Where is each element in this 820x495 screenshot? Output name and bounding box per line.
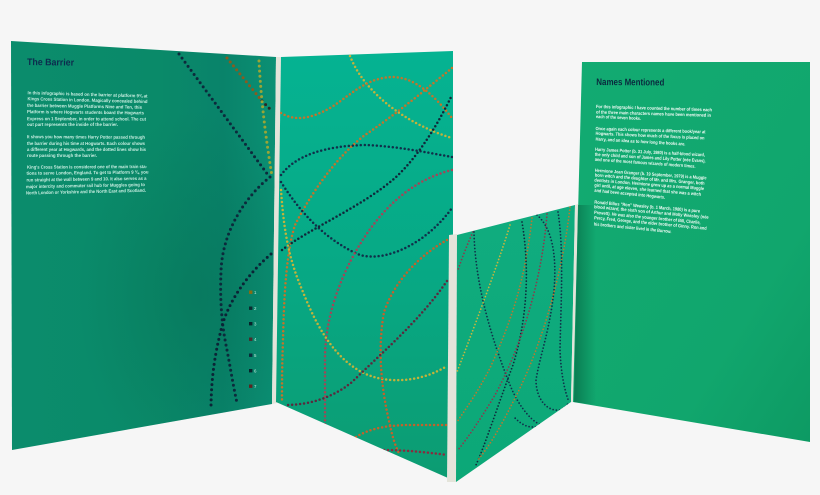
legend: seven book colours: 2 [254, 306, 257, 311]
text block: barrier introduction: Express on 1 September, in order to attend school. The cut [27, 116, 146, 122]
text block: names explanation and character biographies: Hermione Jean Granger (b. 19 September, 1979) is a Muggle [595, 168, 707, 180]
text block: barrier introduction: Platform is where Hogwarts students board the Hogwarts [27, 109, 144, 115]
legend: seven book colours: 5 [254, 353, 257, 358]
text block: names explanation and character biographies: Hogwarts. This shows how much of the focus is placed on [595, 131, 705, 140]
text block: barrier introduction: North London or Yorkshire and the North East and Scotland. [26, 188, 146, 195]
text block: names explanation and character biographies: Harry James Potter (b. 31 July, 1980) is a half-blood wizard, [595, 147, 705, 157]
legend: seven book colours [249, 290, 257, 389]
panel: third dotted chart [456, 205, 575, 482]
text block: names explanation and character biographies: blood wizard, the sixth son of Arthur and Molly Weasley (née [594, 204, 709, 220]
text block: names explanation and character biographies: Prewett). He was also the younger brother of Bill, Charlie, [594, 210, 701, 225]
text block: names explanation and character biographies: of the three main characters names have been mentioned in [596, 110, 711, 118]
text block: barrier introduction: the barrier between Muggle Platforms Nine and Ten, this [27, 103, 142, 110]
text block: names explanation and character biographies [594, 104, 712, 234]
chart: dotted route lines, centre panel [281, 56, 452, 455]
text block: barrier introduction: out part represents the inside of the barrier. [27, 122, 118, 127]
legend: seven book colours: 3 [254, 321, 257, 326]
text block: names explanation and character biographies: Once again each colour represents a different book/year at [595, 126, 706, 134]
text block: barrier introduction: tions to serve London, England. To get to Platform 9 ¾, you [26, 169, 149, 176]
text block: barrier introduction: In this infographic is based on the barrier at platform 9¾ at [27, 89, 148, 99]
panel: The Barrier [11, 41, 276, 450]
text block: barrier introduction: Kings Cross Station in London. Magically concealed behind [27, 96, 148, 104]
divider: second fold [447, 234, 457, 482]
text block: barrier introduction: major intercity and commuter rail hub for Muggles going to [26, 182, 145, 189]
chart: dotted route lines, third panel [457, 207, 570, 465]
legend: seven book colours: 1 [254, 290, 257, 295]
text block: names explanation and character biographies: the only child and son of James and Lily Potter (née Evans), [595, 152, 706, 163]
text block: names explanation and character biographies: girl until, at age eleven, she learned that she was a witch [594, 183, 701, 197]
text block: barrier introduction: a different year at Hogwards, and the dotted lines show his [27, 147, 146, 152]
legend: seven book colours: 4 [254, 337, 257, 342]
text block: names explanation and character biographies: each of the seven books. [596, 114, 641, 121]
heading: The Barrier: The Barrier [27, 57, 74, 69]
divider: first fold [272, 57, 281, 404]
text block: names explanation and character biographies: Harry, and an idea as to how long the books are. [595, 137, 686, 147]
legend: seven book colours: 6 [254, 368, 257, 373]
panel: Names Mentioned [573, 62, 810, 442]
text block: barrier introduction: King's Cross Station is considered one of the main train sta- [27, 164, 147, 170]
text block: names explanation and character biographies: dentists in London. Hermione grew up as a normal Muggle [594, 178, 705, 191]
text block: barrier introduction: It shows you how many times Harry Potter passed through [27, 134, 145, 140]
text block: names explanation and character biographies: and one of the most famous wizards of modern times. [595, 157, 696, 169]
text block: names explanation and character biographies: Ronald Bilius "Ron" Weasley (b. 1 March, 1980) is a pure [594, 200, 701, 214]
text block: barrier introduction: run straight at the wall between 9 and 10. It also serves as a [26, 176, 147, 182]
text block: names explanation and character biographies: For this infographic I have counted the number of times each [596, 104, 712, 112]
panel: centre dotted chart [276, 51, 453, 478]
legend: seven book colours: 7 [254, 384, 257, 389]
text block: barrier introduction: the barrier during his time at Hogwarts. Each colour shows [27, 141, 145, 146]
divider: third fold [571, 204, 578, 402]
text block: names explanation and character biographies: born witch and the daughter of Mr. and Mrs. Granger, both [595, 173, 705, 186]
text block: barrier introduction: route passing through the barrier. [27, 153, 97, 158]
text block: barrier introduction [26, 89, 149, 195]
text block: names explanation and character biographies: Percy, Fred, George, and the elder brother of Ginny. Ron and [594, 215, 707, 231]
text block: names explanation and character biographies: and had been accepted into Hogwarts. [594, 188, 665, 200]
heading: Names Mentioned: Names Mentioned [596, 77, 665, 88]
text block: names explanation and character biographies: his brothers and sister lived in the Burrow. [594, 222, 672, 234]
chart: dotted route lines, left panel [179, 54, 272, 410]
